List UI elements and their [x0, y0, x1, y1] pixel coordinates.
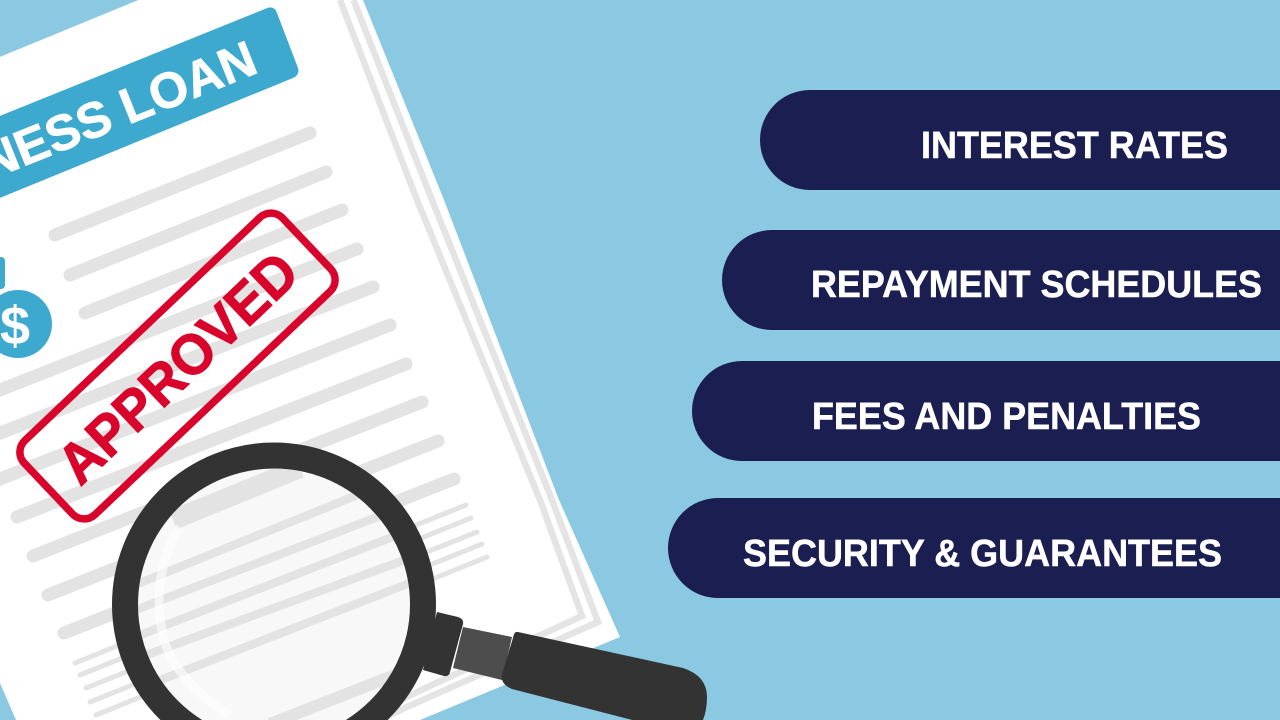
- paper sheet stack: [0, 0, 620, 720]
- grip: [502, 632, 707, 720]
- pill: repayment schedules: [722, 230, 1280, 330]
- pill: security and guarantees: [668, 498, 1280, 598]
- pill: interest rates: INTEREST RATES: [921, 125, 1228, 167]
- body text lines: [0, 133, 454, 633]
- pill: fees and penalties: [692, 361, 1280, 461]
- stamp: approved: APPROVED: [45, 240, 311, 497]
- pill: interest rates: [760, 90, 1280, 190]
- connector: [453, 627, 512, 680]
- fine print lines: [75, 505, 487, 715]
- pill: repayment schedules: REPAYMENT SCHEDULES: [811, 264, 1262, 306]
- lens with magnified lines: [130, 468, 415, 720]
- panel: loan document: [0, 0, 620, 720]
- ring: [125, 456, 423, 720]
- pill: fees and penalties: FEES AND PENALTIES: [812, 396, 1201, 438]
- icon: magnifying glass: [125, 456, 707, 720]
- icon: dollar coin: [0, 257, 52, 358]
- collar: [423, 612, 463, 676]
- icon: dollar coin: $: [0, 296, 30, 356]
- pill: security and guarantees: SECURITY & GUARANTEES: [743, 533, 1222, 575]
